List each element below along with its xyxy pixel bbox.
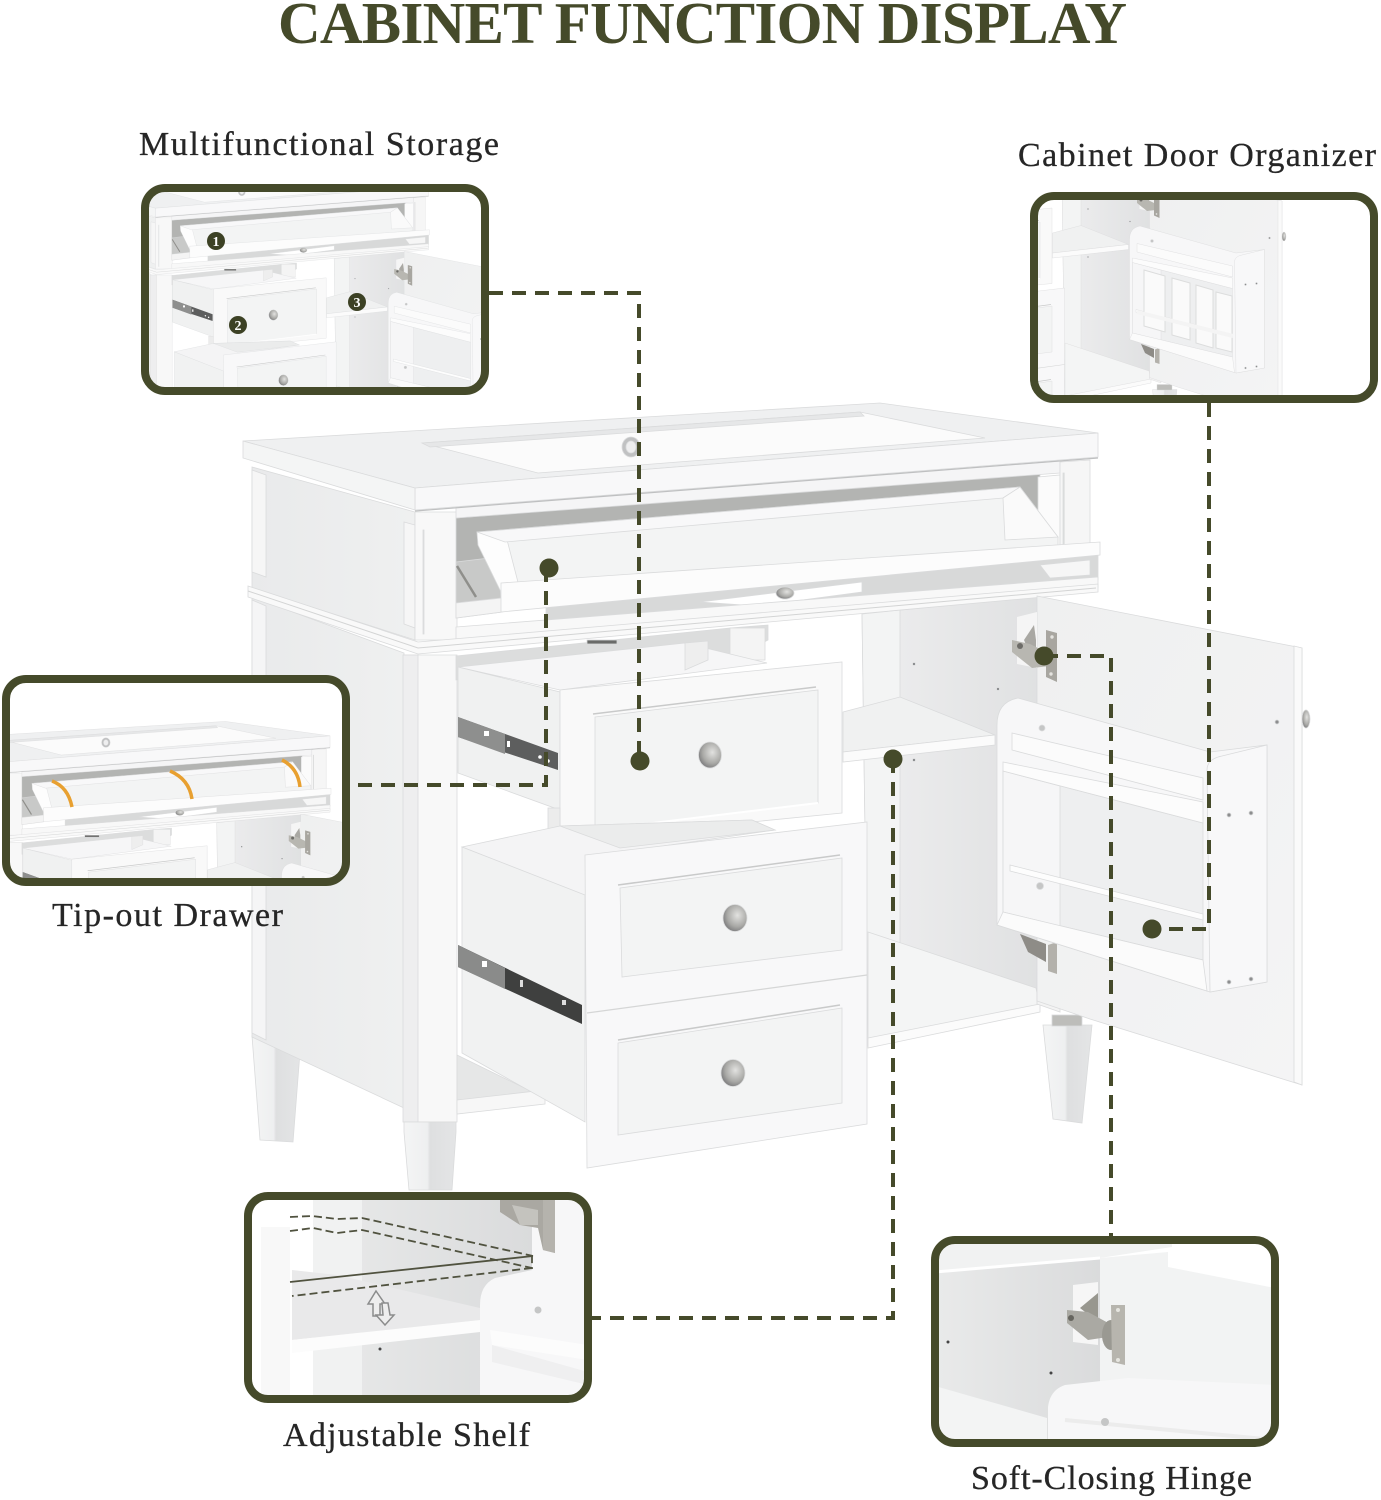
toiletries in organizer <box>1144 270 1232 352</box>
lower drawers side wall <box>462 847 585 1122</box>
strut of tip-out <box>456 557 502 618</box>
top drawer side wall <box>458 667 560 810</box>
up-down arrow icon <box>368 1291 394 1325</box>
frieze rail <box>456 461 1060 518</box>
top drawer slide <box>458 717 558 770</box>
lower drawers fronts <box>585 822 867 1168</box>
front left post <box>404 655 457 1122</box>
dashed leader lines <box>358 293 1209 1318</box>
front leg <box>404 1122 456 1190</box>
hinge <box>500 1196 555 1253</box>
hinge bottom <box>1020 934 1057 974</box>
door organizer <box>997 698 1267 992</box>
label: adjustable shelf: Adjustable Shelf <box>283 1417 531 1454</box>
handle below tip-out <box>700 582 862 606</box>
door <box>1100 1252 1271 1384</box>
organizer <box>1048 1381 1100 1439</box>
orange motion arcs <box>52 760 300 807</box>
number badge 1 <box>207 232 225 250</box>
door <box>532 1227 533 1270</box>
tip-out drawer panel <box>477 487 1058 590</box>
label: soft-closing hinge: Soft-Closing Hinge <box>971 1460 1252 1497</box>
back wall <box>362 1200 532 1395</box>
right leg <box>1043 1025 1092 1123</box>
top drawer interior <box>458 643 767 690</box>
hinge mount <box>1073 1282 1098 1345</box>
rear structure behind top drawer <box>456 625 768 680</box>
countertop <box>243 403 1098 511</box>
number badge 3: 3 <box>354 296 360 311</box>
tip-out opening <box>456 472 1040 610</box>
hinge <box>1067 1293 1125 1365</box>
counter edge <box>939 1244 1172 1270</box>
top drawer front <box>560 662 842 841</box>
marker dots <box>540 558 1162 938</box>
left side panel <box>252 597 404 1108</box>
label: cabinet door organizer: Cabinet Door Organizer <box>1018 137 1377 174</box>
vanity cabinet illustration <box>243 403 1310 1190</box>
door organizer <box>480 1270 532 1395</box>
hinge post lower <box>1037 960 1060 1012</box>
small post below top drawer <box>548 808 560 838</box>
number badge 1: 1 <box>212 235 220 250</box>
label: tip-out drawer: Tip-out Drawer <box>52 897 284 934</box>
neighbouring drawer post <box>261 1227 290 1399</box>
inset: multifunctional storage <box>141 184 489 395</box>
back wall <box>935 1258 1100 1443</box>
shelf under lower drawers <box>457 1055 545 1112</box>
number badge 2: 2 <box>234 319 242 334</box>
dashed shelf positions <box>290 1216 533 1296</box>
door <box>1037 596 1302 1085</box>
shelf <box>292 1270 480 1340</box>
inset: tip-out drawer <box>2 675 350 886</box>
rear compartment <box>862 596 1037 1046</box>
rear left leg <box>252 1036 300 1142</box>
number badge 2 <box>229 316 247 334</box>
inset: adjustable shelf <box>248 1196 588 1399</box>
moulding band <box>248 584 1098 654</box>
adjustable shelf <box>843 697 995 752</box>
floor <box>939 1388 1047 1439</box>
mid rail <box>456 577 1098 642</box>
grey under the ledge <box>546 552 1098 632</box>
lower drawers interior <box>462 820 775 896</box>
number badge 3 <box>348 293 366 311</box>
inset: cabinet door organizer <box>1030 192 1378 403</box>
hinge top <box>1012 612 1057 682</box>
lower drawers slide <box>458 945 582 1024</box>
inset: soft-closing hinge <box>935 1240 1275 1443</box>
label: multifunctional storage: Multifunctional Storage <box>139 126 499 163</box>
